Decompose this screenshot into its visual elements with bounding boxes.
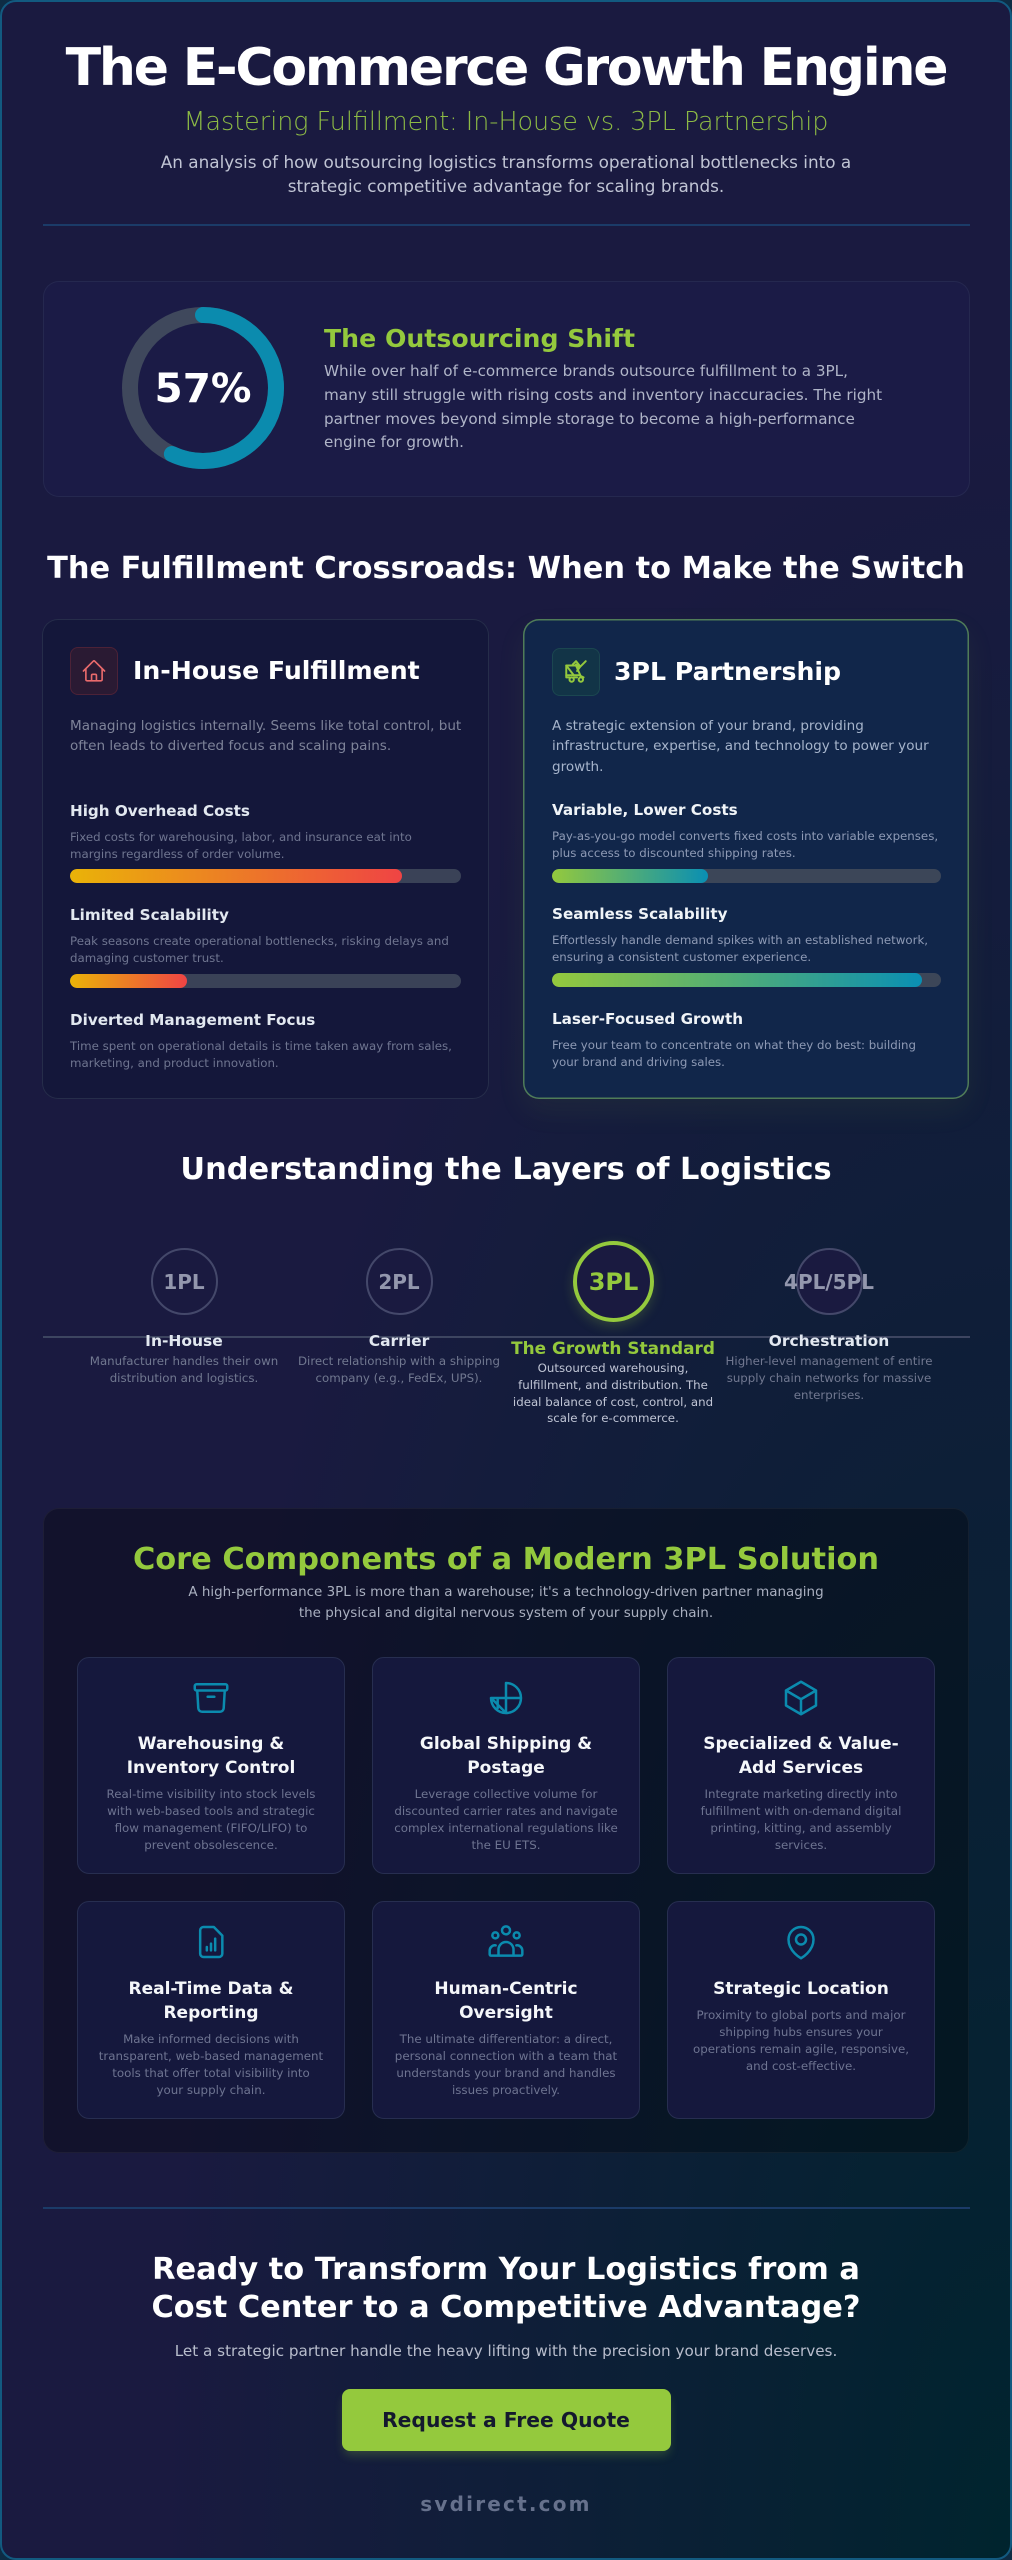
- stat paragraph: [324, 362, 882, 451]
- card text: shipping hubs ensures your: [719, 2025, 883, 2039]
- subtitle: Mastering Fulfillment: In-House vs. 3PL Partnership: [184, 106, 828, 136]
- item text: damaging customer trust.: [70, 951, 224, 965]
- card text: the EU ETS.: [471, 1838, 541, 1852]
- intro text: [160, 152, 851, 196]
- card description: [70, 718, 461, 754]
- node: 2PL: [366, 1248, 432, 1315]
- card description: A strategic extension of your brand, providing: [552, 718, 864, 734]
- icon: house: [70, 647, 118, 695]
- item text: ensuring a consistent customer experience.: [552, 950, 811, 964]
- card: real-time data: [77, 1901, 345, 2119]
- card text: The ultimate differentiator: a direct,: [400, 2032, 612, 2046]
- card text: [693, 2008, 909, 2073]
- card heading: Add Services: [739, 1758, 863, 1778]
- item: laser-focused growth: Laser-Focused Growth: [552, 1010, 743, 1028]
- card heading: [434, 1979, 578, 2023]
- item text: [552, 933, 928, 964]
- icon: cube: [784, 1680, 818, 1716]
- icon: truck: [552, 648, 600, 696]
- button: request a free quote: Request a Free Quote: [382, 2408, 630, 2432]
- card text: Leverage collective volume for: [415, 1786, 597, 1800]
- node: 3PL highlighted: [573, 1241, 654, 1322]
- card text: Proximity to global ports and major: [696, 2008, 905, 2022]
- progress bar: 30%: [70, 974, 461, 988]
- card text: understands your brand and handles: [396, 2066, 616, 2080]
- layer: orchestration: [726, 1332, 932, 1402]
- item: variable, lower costs: Variable, Lower Costs: [552, 800, 738, 818]
- card text: services.: [775, 1838, 827, 1852]
- card: specialized services: [667, 1657, 935, 1874]
- item text: Pay-as-you-go model converts fixed costs into variable expenses,: [552, 829, 938, 843]
- layer: carrier: [298, 1332, 500, 1385]
- intro text: An analysis of how outsourcing logistics transforms operational bottlenecks into a: [161, 152, 851, 172]
- intro text: strategic competitive advantage for scaling brands.: [288, 176, 724, 196]
- item text: plus access to discounted shipping rates.: [552, 846, 796, 860]
- item: high overhead costs: High Overhead Costs: [70, 802, 250, 820]
- layer: orchestration: supply chain networks for massive: [727, 1371, 931, 1385]
- node: 2PL: 2PL: [378, 1270, 420, 1294]
- node: 1PL: 1PL: [163, 1270, 205, 1294]
- item text: margins regardless of order volume.: [70, 847, 285, 861]
- call to action heading: Cost Center to a Competitive Advantage?: [151, 2290, 861, 2325]
- donut chart: 57%: [122, 307, 284, 469]
- card text: and cost-effective.: [746, 2059, 856, 2073]
- icon: document chart: [198, 1926, 224, 1958]
- item text: your brand and driving sales.: [552, 1055, 725, 1069]
- icon: archive box: [194, 1683, 228, 1713]
- icon: pie globe: [490, 1682, 522, 1714]
- card text: [107, 1786, 315, 1852]
- item text: [70, 934, 449, 965]
- card text: operations remain agile, responsive,: [693, 2042, 909, 2056]
- progress bar: 85%: [70, 869, 461, 883]
- item text: [70, 830, 412, 861]
- stat paragraph: While over half of e-commerce brands outsource fulfillment to a 3PL,: [324, 362, 848, 380]
- layer: the growth standard: fulfillment, and distribution. The: [518, 1378, 708, 1392]
- card: strategic location: [667, 1901, 935, 2119]
- call to action heading: Ready to Transform Your Logistics from a: [152, 2252, 860, 2287]
- layer: carrier: company (e.g., FedEx, UPS).: [316, 1371, 482, 1385]
- node: 1PL: [150, 1248, 218, 1315]
- card text: [700, 1786, 901, 1852]
- section heading: crossroads: The Fulfillment Crossroads: When to Make the Switch: [47, 551, 965, 586]
- card heading: Global Shipping &: [420, 1734, 592, 1754]
- card: human-centric oversight: [372, 1901, 640, 2119]
- button: request a free quote: [342, 2389, 670, 2450]
- item text: Peak seasons create operational bottlenecks, risking delays and: [70, 934, 449, 948]
- card title: 3PL Partnership: [614, 657, 841, 686]
- card text: [394, 1786, 618, 1852]
- call to action heading: [151, 2252, 861, 2325]
- stat paragraph: partner moves beyond simple storage to become a high-performance: [324, 410, 855, 428]
- card heading: Warehousing &: [138, 1734, 284, 1754]
- card text: issues proactively.: [452, 2083, 560, 2097]
- item text: Time spent on operational details is time taken away from sales,: [70, 1039, 452, 1053]
- layer: orchestration: Higher-level management of entire: [726, 1354, 932, 1368]
- layer: the growth standard: [511, 1338, 715, 1425]
- card text: [99, 2032, 323, 2097]
- card text: personal connection with a team that: [395, 2049, 617, 2063]
- item text: Free your team to concentrate on what they do best: building: [552, 1038, 916, 1052]
- card heading: Strategic Location: [713, 1979, 889, 1999]
- layer: carrier: Direct relationship with a shipping: [298, 1354, 500, 1368]
- donut chart: 57%: 57%: [155, 364, 251, 412]
- card text: [395, 2032, 617, 2097]
- card text: transparent, web-based management: [99, 2049, 323, 2063]
- panel description: A high-performance 3PL is more than a warehouse; it's a technology-driven partner managing: [188, 1584, 824, 1600]
- card: warehousing: [77, 1657, 345, 1874]
- icon: people group: [488, 1925, 524, 1957]
- panel: core components: [43, 1508, 969, 2153]
- item text: Effortlessly handle demand spikes with an established network,: [552, 933, 928, 947]
- timeline: logistics layers: [43, 1241, 970, 1425]
- card description: infrastructure, expertise, and technology to power your: [552, 738, 929, 754]
- icon: map pin: [787, 1926, 815, 1960]
- card heading: Oversight: [459, 2003, 553, 2023]
- card text: tools that offer total visibility into: [112, 2066, 310, 2080]
- layer: in-house: [90, 1332, 278, 1385]
- stat paragraph: many still struggle with rising costs and inventory inaccuracies. The right: [324, 386, 882, 404]
- card heading: Reporting: [163, 2003, 259, 2023]
- item: diverted management focus: Diverted Management Focus: [70, 1010, 315, 1028]
- stat heading: The Outsourcing Shift: [324, 324, 635, 353]
- panel heading: Core Components of a Modern 3PL Solution: [133, 1542, 879, 1577]
- layer: orchestration: Orchestration: [769, 1332, 889, 1350]
- card text: your supply chain.: [156, 2083, 266, 2097]
- card title: In-House Fulfillment: [133, 656, 420, 685]
- panel description: the physical and digital nervous system of your supply chain.: [299, 1605, 713, 1621]
- item text: Fixed costs for warehousing, labor, and insurance eat into: [70, 830, 412, 844]
- footer: website: svdirect.com: [420, 2492, 592, 2516]
- card heading: Human-Centric: [434, 1979, 578, 1999]
- panel description: [188, 1584, 824, 1621]
- card text: discounted carrier rates and navigate: [394, 1804, 618, 1818]
- layer: the growth standard: ideal balance of cost, control, and: [513, 1395, 713, 1409]
- card description: Managing logistics internally. Seems like total control, but: [70, 718, 461, 734]
- layer: in-house: distribution and logistics.: [110, 1371, 258, 1385]
- card heading: Real-Time Data &: [128, 1979, 294, 1999]
- card text: Make informed decisions with: [123, 2032, 299, 2046]
- card description: growth.: [552, 759, 603, 775]
- section heading: layers of logistics: Understanding the Layers of Logistics: [180, 1152, 832, 1187]
- layer: the growth standard: The Growth Standard: [511, 1338, 715, 1358]
- node: 3PL highlighted: 3PL: [589, 1268, 638, 1296]
- card text: Real-time visibility into stock levels: [107, 1786, 315, 1800]
- card text: Integrate marketing directly into: [704, 1786, 898, 1800]
- progress bar: 40%: [552, 869, 941, 883]
- card text: with web-based tools and strategic: [107, 1804, 315, 1818]
- panel: the outsourcing shift: [43, 281, 970, 497]
- card: global shipping: [372, 1657, 640, 1874]
- card text: prevent obsolescence.: [144, 1838, 278, 1852]
- card heading: Inventory Control: [127, 1758, 295, 1778]
- node: 4PL/5PL: [796, 1248, 862, 1315]
- node: 4PL/5PL: 4PL/5PL: [784, 1270, 874, 1294]
- card heading: [420, 1734, 592, 1778]
- layer: the growth standard: Outsourced warehousing,: [538, 1361, 688, 1375]
- panel: in-house fulfillment: [42, 619, 489, 1099]
- call to action text: Let a strategic partner handle the heavy lifting with the precision your brand deserves.: [175, 2342, 837, 2360]
- card heading: [127, 1734, 295, 1778]
- item: limited scalability: Limited Scalability: [70, 906, 229, 924]
- card heading: Postage: [467, 1758, 545, 1778]
- card heading: Specialized & Value-: [703, 1734, 899, 1754]
- card description: [552, 718, 929, 775]
- item text: [70, 1039, 452, 1070]
- card heading: [703, 1734, 899, 1778]
- item text: [552, 1038, 916, 1069]
- card text: fulfillment with on-demand digital: [701, 1804, 901, 1818]
- layer: orchestration: enterprises.: [794, 1388, 864, 1402]
- layer: in-house: In-House: [145, 1332, 223, 1350]
- card text: complex international regulations like: [394, 1820, 618, 1834]
- item text: marketing, and product innovation.: [70, 1056, 279, 1070]
- panel: 3PL partnership: [523, 619, 969, 1099]
- item: seamless scalability: Seamless Scalability: [552, 904, 727, 922]
- card description: often leads to diverted focus and scaling pains.: [70, 738, 391, 754]
- card heading: [128, 1979, 294, 2023]
- layer: the growth standard: scale for e-commerce.: [547, 1411, 679, 1425]
- card text: printing, kitting, and assembly: [710, 1820, 892, 1834]
- layer: carrier: Carrier: [369, 1332, 429, 1350]
- title: The E-Commerce Growth Engine: [66, 38, 946, 98]
- item text: [552, 829, 938, 860]
- stat paragraph: engine for growth.: [324, 433, 464, 451]
- progress bar: 95%: [552, 973, 941, 987]
- card text: flow management (FIFO/LIFO) to: [115, 1820, 307, 1834]
- layer: in-house: Manufacturer handles their own: [90, 1354, 278, 1368]
